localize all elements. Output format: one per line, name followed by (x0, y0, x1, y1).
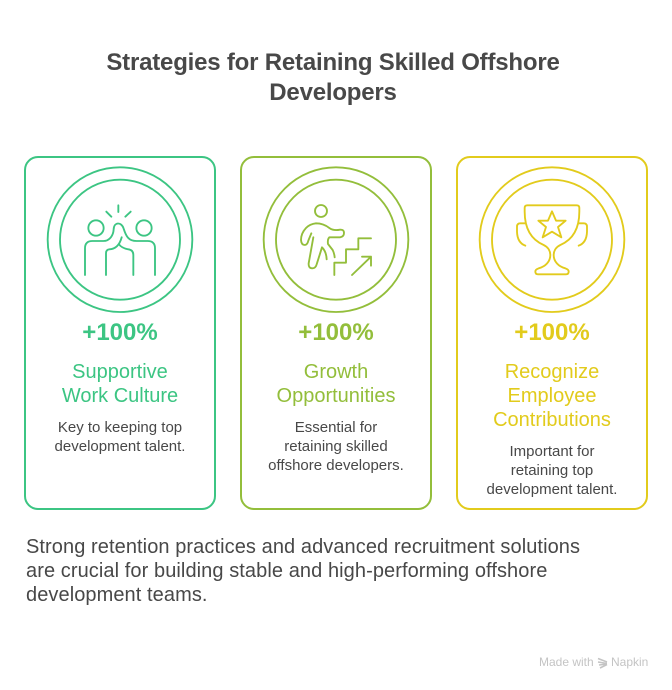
icon: trophy with star (480, 167, 624, 312)
title: Developers (269, 79, 397, 106)
text: supportive description: development talent. (55, 438, 185, 455)
heading: growth opportunities: Growth (304, 361, 368, 383)
text: closing statement: development teams. (26, 584, 208, 606)
footer: made with Napkin (539, 655, 648, 669)
heading: growth opportunities (277, 361, 395, 407)
icon: high five (48, 167, 192, 312)
stat: recognize +100%: +100% (514, 319, 590, 346)
text: closing statement (26, 536, 580, 606)
text: recognize description: retaining top (511, 462, 593, 479)
panel: recognize employee contributions (456, 156, 648, 510)
stat: growth +100%: +100% (298, 319, 374, 346)
text: supportive description (55, 419, 185, 455)
text: growth description (268, 419, 404, 474)
icon: person climbing stairs (264, 167, 408, 312)
heading: growth opportunities: Opportunities (277, 385, 395, 407)
title: Strategies for Retaining Skilled Offshore (106, 49, 560, 76)
text: growth description: retaining skilled (284, 438, 388, 455)
text: closing statement: are crucial for building stable and high-performing offshore (26, 560, 547, 582)
heading: supportive work culture (62, 361, 178, 407)
text: growth description: Essential for (295, 419, 377, 436)
heading: recognize employee contributions: Recognize (505, 361, 599, 383)
text: closing statement: Strong retention practices and advanced recruitment solutions (26, 536, 580, 558)
title (106, 49, 560, 106)
footer: made with Napkin: Made with (539, 655, 594, 669)
heading: recognize employee contributions (493, 361, 611, 431)
heading: supportive work culture: Supportive (72, 361, 168, 383)
text: recognize description (487, 443, 617, 498)
heading: supportive work culture: Work Culture (62, 385, 178, 407)
panel: growth opportunities (240, 156, 432, 510)
stat: supportive +100%: +100% (82, 319, 158, 346)
text: recognize description: Important for (509, 443, 595, 460)
text: supportive description: Key to keeping top (58, 419, 182, 436)
heading: recognize employee contributions: Employee (508, 385, 596, 407)
heading: recognize employee contributions: Contributions (493, 409, 611, 431)
text: recognize description: development talent. (487, 481, 617, 498)
text: growth description: offshore developers. (268, 457, 404, 474)
footer: made with Napkin: Napkin (611, 655, 648, 669)
panel: supportive work culture (24, 156, 216, 510)
